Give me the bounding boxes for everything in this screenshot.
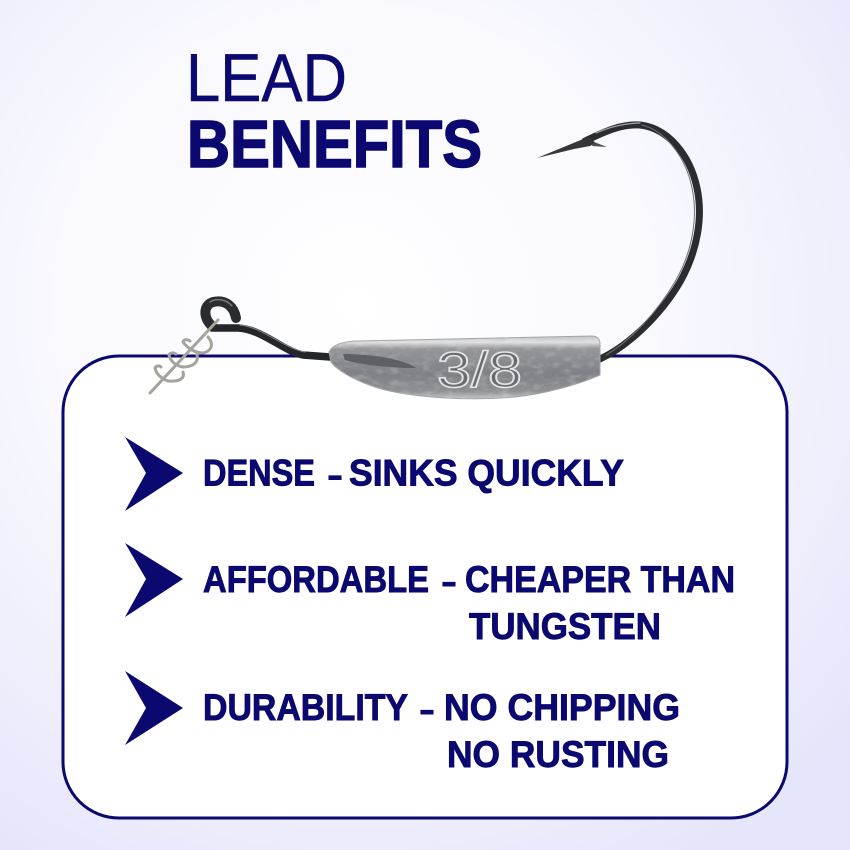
text: durability: DURABILITY bbox=[203, 687, 408, 728]
benefit: durability bbox=[125, 671, 680, 775]
icon: arrow durability bbox=[125, 671, 183, 745]
hook shank and eye bbox=[205, 300, 330, 357]
title: LEAD bbox=[186, 40, 347, 116]
text: dense bbox=[203, 452, 624, 496]
hook point bbox=[537, 137, 596, 158]
text: dense: DENSE bbox=[203, 452, 315, 494]
icon: arrow dense bbox=[125, 437, 183, 511]
text: affordable: CHEAPER THAN bbox=[465, 559, 735, 600]
benefit: dense bbox=[125, 437, 624, 511]
icon: arrow affordable bbox=[125, 543, 183, 617]
screw coil bbox=[150, 320, 218, 393]
text: dense: SINKS QUICKLY bbox=[349, 452, 624, 494]
text: affordable: TUNGSTEN bbox=[469, 606, 661, 647]
title: BENEFITS bbox=[187, 107, 482, 182]
fishing hook bbox=[150, 123, 699, 399]
text: durability: NO CHIPPING bbox=[444, 687, 680, 728]
benefit: affordable bbox=[125, 543, 735, 647]
text: affordable: AFFORDABLE bbox=[203, 559, 429, 600]
text: affordable bbox=[203, 559, 735, 647]
text: durability: NO RUSTING bbox=[447, 734, 669, 775]
hook bend bbox=[585, 123, 699, 359]
title bbox=[186, 40, 482, 182]
lead sinker bbox=[329, 336, 600, 399]
text: dense: – bbox=[328, 454, 342, 496]
sinker weight 3/8: 3/8 bbox=[437, 342, 522, 398]
text: durability: – bbox=[420, 689, 434, 730]
panel: benefits bbox=[63, 356, 787, 818]
text: durability bbox=[203, 687, 680, 775]
text: affordable: – bbox=[442, 561, 456, 602]
